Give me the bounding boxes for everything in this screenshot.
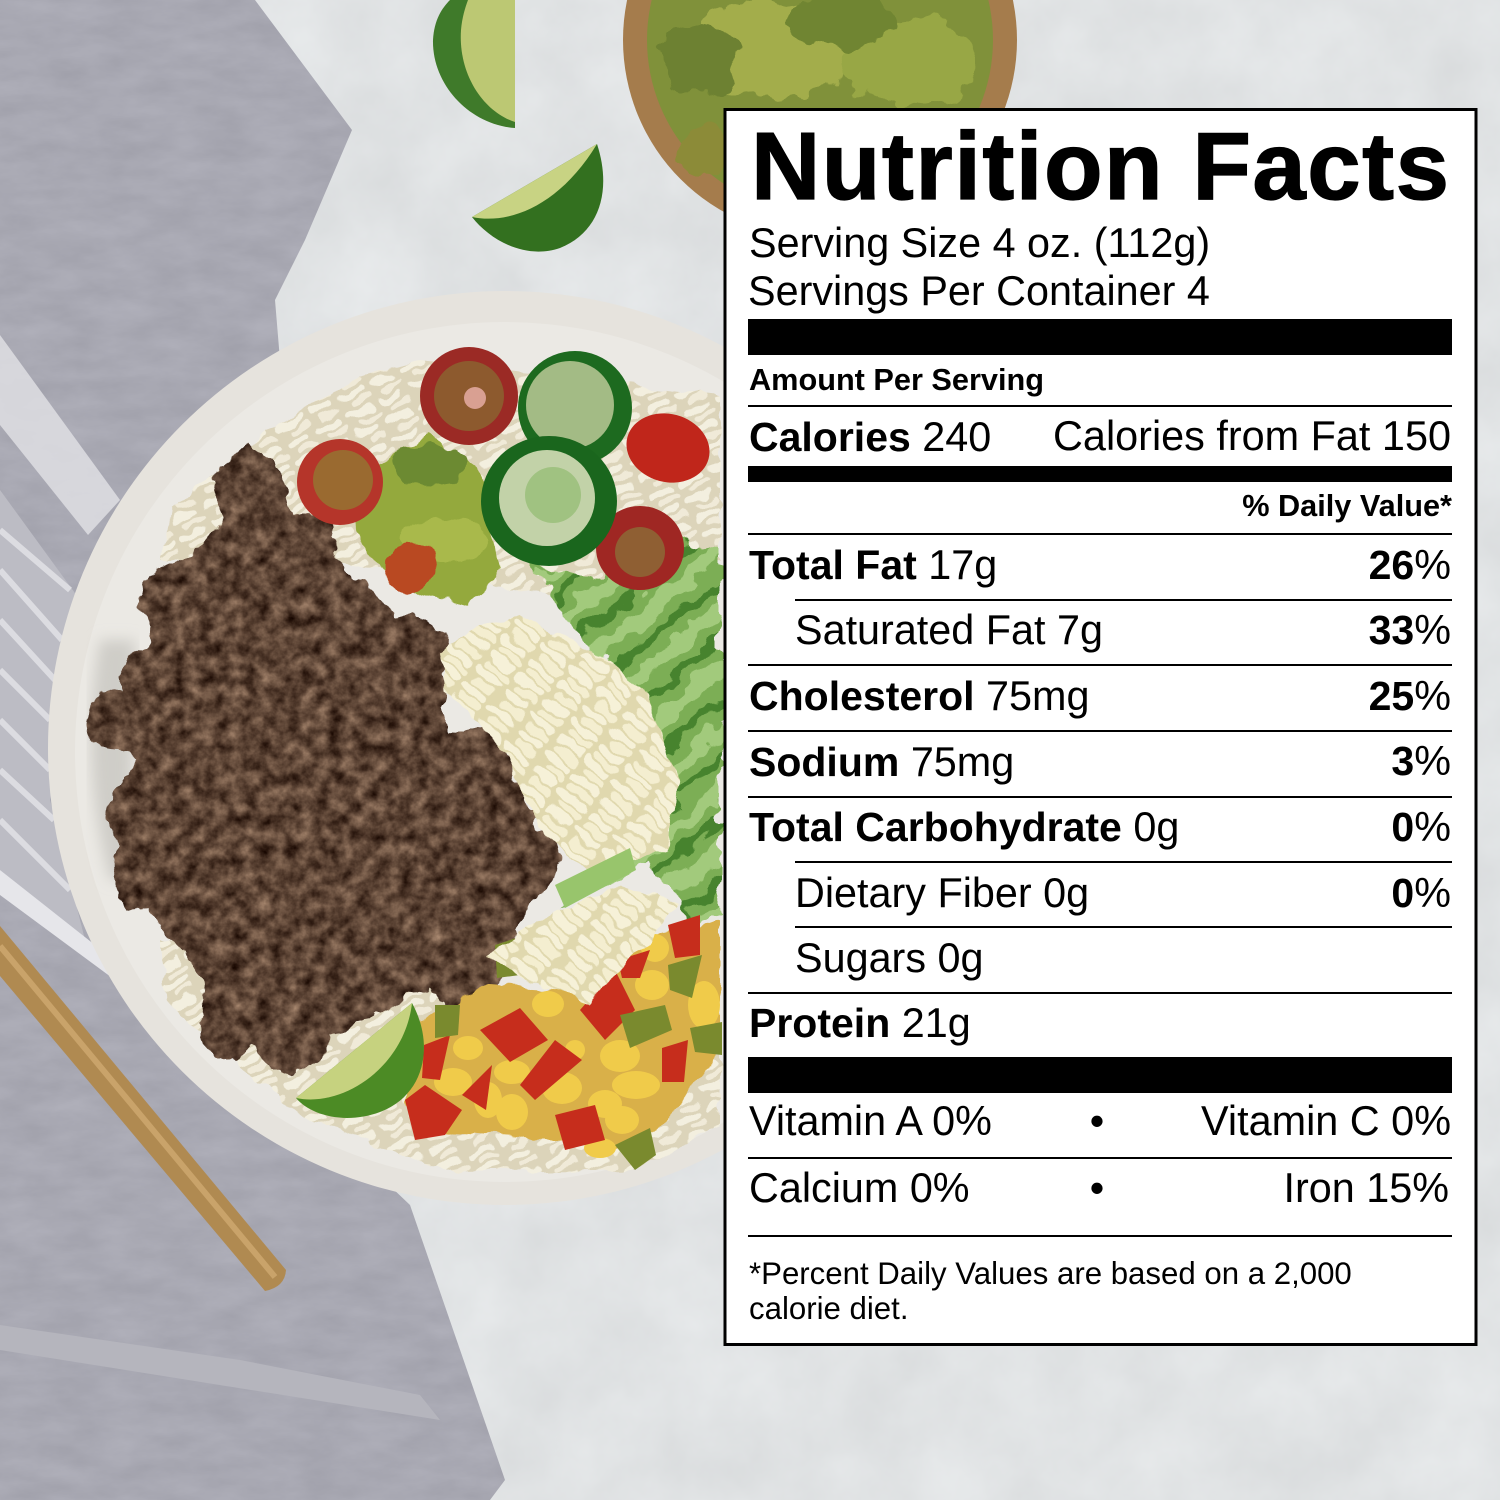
title: Nutrition Facts — [751, 113, 1449, 220]
cherry tomato 1 — [420, 347, 518, 445]
calories row — [749, 413, 1451, 460]
serving information: Servings Per Container 4 — [748, 268, 1210, 314]
amount per serving: Amount Per Serving — [749, 362, 1044, 397]
daily value header: % Daily Value* — [1242, 488, 1452, 523]
guacamole scoop — [355, 435, 500, 605]
sodium row: Sodium 75mg — [749, 739, 1014, 785]
shredded lettuce — [525, 535, 720, 925]
saturated fat row: Saturated Fat 7g — [795, 607, 1103, 653]
dietary fiber row: 0% — [1391, 870, 1451, 916]
lime wedge middle — [472, 144, 603, 252]
lime wedge in bowl — [296, 1003, 424, 1118]
red pepper pieces — [405, 915, 700, 1150]
lettuce piece — [555, 848, 636, 908]
cherry tomato 2 — [297, 439, 383, 525]
total fat row — [749, 542, 1451, 588]
inner bowl shadow — [91, 640, 135, 880]
dietary fiber row — [795, 870, 1451, 916]
cheese on peppers — [484, 885, 680, 1005]
footnote: *Percent Daily Values are based on a 2,000 — [749, 1256, 1352, 1291]
minerals row: • — [1090, 1165, 1104, 1211]
cholesterol row — [749, 673, 1451, 719]
white serving bowl — [48, 291, 962, 1205]
vitamins row: Vitamin C 0% — [1201, 1098, 1451, 1144]
seasoned ground beef — [85, 445, 561, 1071]
cherry tomato 3 — [619, 404, 717, 492]
grey linen napkin — [0, 0, 505, 1500]
total fat row: Total Fat 17g — [749, 542, 997, 588]
corn and peppers — [405, 915, 722, 1170]
saturated fat row: 33% — [1369, 607, 1451, 653]
jalapeno slice 2 — [481, 436, 617, 566]
minerals row: Iron 15% — [1284, 1165, 1449, 1211]
nutrition facts panel — [725, 110, 1476, 1344]
total fat row: 26% — [1369, 542, 1451, 588]
wooden handle — [0, 926, 286, 1291]
green pepper pieces — [435, 935, 722, 1170]
thick divider — [748, 319, 1452, 355]
footnote — [749, 1256, 1352, 1326]
total carbohydrate row: Total Carbohydrate 0g — [749, 804, 1179, 850]
wooden guacamole bowl — [623, 0, 1017, 237]
calories row: Calories from Fat 150 — [1053, 413, 1451, 459]
lime wedge top — [433, 0, 515, 128]
jalapeno slice 1 — [518, 351, 632, 465]
minerals row: Calcium 0% — [749, 1165, 970, 1211]
total carbohydrate row: 0% — [1391, 804, 1451, 850]
sugars row: Sugars 0g — [795, 935, 983, 981]
cholesterol row: Cholesterol 75mg — [749, 673, 1089, 719]
serving information — [748, 220, 1210, 314]
white rice — [160, 360, 720, 1172]
panel background — [725, 110, 1476, 1344]
sodium row — [749, 738, 1451, 785]
serving information: Serving Size 4 oz. (112g) — [749, 220, 1210, 266]
shredded cheese — [440, 615, 680, 875]
protein row: Protein 21g — [749, 1000, 971, 1046]
dietary fiber row: Dietary Fiber 0g — [795, 870, 1089, 916]
cherry tomato 4 — [596, 506, 684, 590]
sodium row: 3% — [1391, 738, 1451, 784]
vitamins row: • — [1090, 1098, 1104, 1144]
cholesterol row: 25% — [1369, 673, 1451, 719]
vitamins row — [749, 1098, 1451, 1144]
dividers — [748, 405, 1452, 1237]
footnote: calorie diet. — [749, 1291, 908, 1326]
calories row: Calories 240 — [749, 414, 991, 460]
saturated fat row — [795, 607, 1451, 653]
total carbohydrate row — [749, 804, 1451, 850]
minerals row — [749, 1165, 1449, 1211]
vitamins row: Vitamin A 0% — [749, 1098, 992, 1144]
corn kernels — [434, 934, 720, 1158]
